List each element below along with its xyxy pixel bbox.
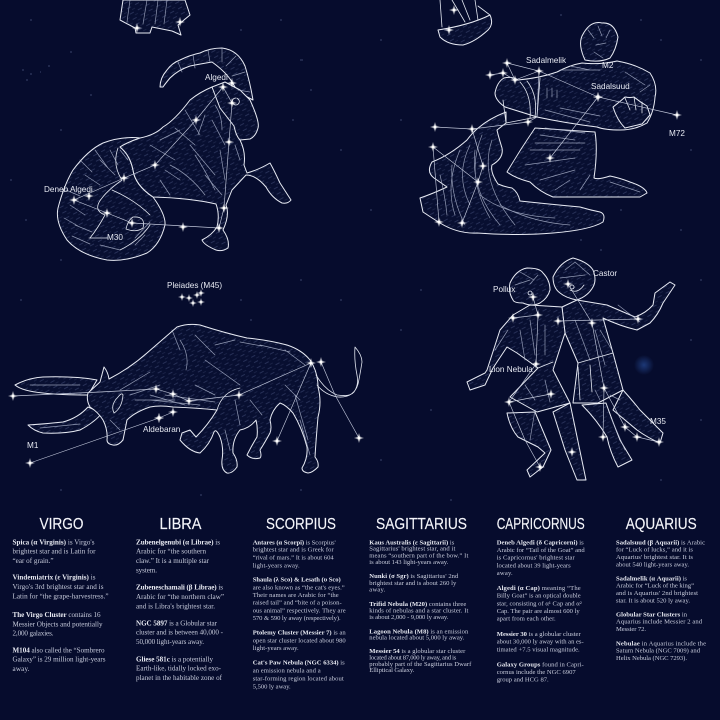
gemini star lines [509, 284, 659, 467]
text: Messier 30: about 30,000 ly away with an es- [497, 639, 584, 646]
text: Sadalmelik: Sadalmelik (α Aquarii) is [616, 575, 687, 582]
text: Nunki: away. [369, 586, 386, 593]
text: Globular Star Clusters: Aquarius include Messier 2 and [616, 619, 703, 626]
text: Shaula and Lesath: raised tail” and “bite of a poison- [253, 600, 342, 607]
text: Kaus Australis: is about 143 light-years away. [369, 559, 449, 566]
text: The Virgo Cluster: Messier Objects and potentially [12, 620, 103, 628]
heading: Scorpius: SCORPIUS [266, 516, 336, 533]
column: Libra [136, 516, 224, 682]
text: Spica [12, 538, 96, 565]
text: Trifid Nebula: Trifid Nebula (M20) contains three [369, 601, 466, 608]
text: Nebulae: Saturn Nebula (NGC 7009) and [616, 648, 701, 655]
label: Algedi: Algedi [205, 73, 228, 82]
text: Galaxy Groups [497, 662, 584, 684]
text: Messier 54: Messier 54 is a globular star cluster [369, 648, 466, 655]
text: Cat's Paw Nebula: an emission nebula and a [253, 668, 321, 675]
text: Trifid Nebula [369, 601, 468, 621]
heading: Aquarius: AQUARIUS [626, 516, 697, 533]
text: Lagoon Nebula: nebula located about 5,000 ly away. [369, 635, 465, 642]
Castor right leg [613, 390, 663, 443]
text: Spica: brightest star and is Latin for [12, 548, 96, 556]
heading: Virgo: VIRGO [40, 516, 84, 533]
text: NGC 5897: NGC 5897 is a Globular star [136, 619, 218, 627]
label: M30: M30 [107, 233, 123, 242]
text: Kaus Australis: Kaus Australis (ε Sagittarii) is [369, 539, 455, 546]
text: Globular Star Clusters: Globular Star Clusters in [616, 611, 688, 618]
constellation: Taurus [8, 281, 364, 473]
text: Globular Star Clusters: Messier 72. [616, 626, 646, 633]
text: Messier 54: located about 87,000 ly away, and is [369, 654, 457, 661]
text: Deneb Algedi: away. [497, 570, 513, 577]
text: Sadalsuud: Aquarius' brightest star. It is [616, 554, 693, 561]
text: Algedi: Cap. The pair are almost 600 ly [497, 608, 580, 615]
text: Sadalmelik: star. It is about 520 ly away. [616, 597, 690, 604]
label: Sadalmelik: Sadalmelik [526, 56, 567, 65]
text: M104: M104 also called the “Sombrero [12, 646, 105, 654]
text: Algedi: Billy Goat” is an optical double [497, 593, 581, 600]
Castor left leg [582, 403, 632, 467]
text: Cat's Paw Nebula: star-forming region located about [253, 675, 344, 682]
text: Antares: light-years away. [253, 562, 300, 569]
text: M104: away. [12, 665, 30, 673]
text: Vindemiatrix: Latin for “the grape-harvestress.” [12, 592, 108, 600]
heading: Libra: LIBRA [160, 516, 202, 533]
text: Sadalsuud [616, 539, 705, 568]
column: Capricornus [497, 516, 585, 684]
text: Zubenelgenubi [136, 538, 220, 575]
twin clothing detail [495, 262, 640, 450]
text: Nebulae: Helix Nebula (NGC 7293). [616, 655, 687, 662]
text: Algedi: Algedi (α Cap) meaning “The [497, 585, 581, 592]
taurus stars [8, 357, 364, 468]
text: Deneb Algedi: Deneb Algedi (δ Capricorni) is [497, 539, 584, 546]
text: The Virgo Cluster [12, 611, 103, 638]
text: Messier 54: probably part of the Sagittarius Dwarf [369, 661, 472, 668]
hand [613, 97, 650, 128]
text: M104: Galaxy” is 29 million light-years [12, 656, 106, 664]
water stream [420, 112, 604, 234]
constellation: Aquarius [420, 23, 685, 234]
ear and body hatching [113, 388, 240, 413]
column: Virgo [12, 516, 108, 673]
text: Trifid Nebula: kinds of nebulas and a star cluster. It [369, 607, 468, 614]
text: Kaus Australis: Sagittarius' brightest star, and it [369, 546, 455, 553]
heading: Capricornus: CAPRICORNUS [497, 516, 585, 533]
text: NGC 5897: cluster and is between 40,000 - [136, 629, 224, 637]
constellation: Gemini [467, 258, 675, 480]
text: Nunki: Nunki (σ Sgr) is Sagittarius' 2nd [369, 573, 459, 580]
text: Algedi: apart from each other. [497, 616, 556, 623]
label: Aldebaran: Aldebaran [143, 425, 181, 434]
label: M1: M1 [27, 441, 39, 450]
text: Shaula and Lesath: 570 & 590 ly away (respectively). [253, 615, 341, 622]
text: Deneb Algedi: Arabic for “Tail of the Goat” and [497, 547, 585, 554]
text: Vindemiatrix: Vindemiatrix (ε Virginis) is [12, 574, 96, 582]
horn ridges and fur [64, 48, 250, 250]
icon: Pleiades star cluster [178, 289, 205, 307]
text: Shaula and Lesath: Their names are Arabic for “the [253, 592, 339, 599]
text: Deneb Algedi [497, 539, 585, 577]
text: Ptolemy Cluster: open star cluster located about 980 [253, 637, 346, 644]
text: Kaus Australis: means “southern part of the bow.” It [369, 552, 468, 559]
text: Cat's Paw Nebula [253, 660, 345, 690]
label: Pleiades (M45): Pleiades (M45) [167, 281, 222, 290]
text: Zubeneschamali: Zubeneschamali (β Librae) is [136, 584, 223, 592]
label: M72: M72 [669, 129, 685, 138]
text: Zubeneschamali: Arabic for “the northern claw” [136, 593, 224, 601]
text: Spica: Spica (α Virginis) is Virgo's [12, 538, 95, 546]
text: Cat's Paw Nebula: 5,500 ly away. [253, 683, 291, 690]
text: Gliese 581c: Gliese 581c is a potentially [136, 655, 213, 663]
text: Sadalsuud: Sadalsuud (β Aquarii) is Arabic [616, 539, 705, 546]
text: Sadalsuud: about 540 light-years away. [616, 561, 689, 568]
capricorn stars [69, 78, 237, 233]
text: Kaus Australis [369, 539, 468, 566]
Pollux head [509, 268, 550, 305]
text: Sadalsuud: for “Luck of lucks,” and it is [616, 547, 693, 554]
label: Sadalsuud: Sadalsuud [591, 82, 630, 91]
label: Pollux: Pollux [493, 285, 515, 294]
gemini stars [504, 279, 664, 472]
text: Shaula and Lesath: Shaula (λ Sco) & Lesath (υ Sco) [253, 577, 341, 584]
text: Globular Star Clusters [616, 611, 703, 633]
text: Messier 30 [497, 631, 584, 653]
text: Nebulae [616, 640, 706, 662]
text: Messier 54: Elliptical Galaxy. [369, 667, 415, 674]
label: M2: M2 [602, 61, 614, 70]
text: Shaula and Lesath [253, 577, 346, 622]
text: Ptolemy Cluster: light-years away. [253, 645, 299, 652]
text: Sadalmelik [616, 575, 698, 604]
text: M104 [12, 646, 106, 673]
text: Shaula and Lesath: ous animal” respectively. They are [253, 607, 346, 614]
text: Gliese 581c: Earth-like, tidally locked exo- [136, 665, 222, 673]
text: Vindemiatrix: Virgo's 3rd brightest star and is [12, 583, 104, 591]
Castor head [553, 258, 595, 300]
column: Scorpius [253, 516, 346, 690]
text: Sadalmelik: and is Aquarius' 2nd brightest [616, 590, 698, 597]
text: Zubenelgenubi: Arabic for “the southern [136, 548, 206, 556]
tail and scale detail [89, 98, 239, 250]
text: NGC 5897 [136, 619, 224, 646]
torso and urn [495, 61, 656, 130]
text: Algedi: star, consisting of α¹ Cap and α² [497, 600, 582, 607]
capricorn head [212, 82, 258, 140]
label: M35: M35 [650, 417, 666, 426]
constellation: Libra scale fragment [438, 0, 492, 45]
text: Ptolemy Cluster: Ptolemy Cluster (Messier 7) is an [253, 630, 346, 637]
text: Galaxy Groups: group and HCG 87. [497, 677, 549, 684]
heading: Sagittarius: SAGITTARIUS [376, 516, 467, 533]
text: Zubenelgenubi: Zubenelgenubi (α Librae) is [136, 538, 220, 546]
Pollux torso and arm [467, 305, 570, 412]
label: Deneb Algedi: Deneb Algedi [44, 185, 93, 194]
aquarius star lines [433, 63, 677, 223]
text: Zubeneschamali: and is Libra's brightest star. [136, 602, 215, 610]
text: Algedi [497, 585, 582, 623]
constellation: Virgo fragment [120, 0, 190, 35]
text: Zubeneschamali [136, 584, 224, 610]
text: Sadalmelik: Arabic for “Luck of the king” [616, 583, 694, 590]
aquarius stars [428, 58, 682, 228]
label: Lion Nebula: Lion Nebula [489, 365, 533, 374]
label: Castor: Castor [593, 269, 617, 278]
capricorn star lines [74, 87, 232, 228]
column: Aquarius [616, 516, 706, 662]
text: Nunki [369, 573, 459, 593]
bull body outline [87, 324, 320, 473]
text: Messier 30: Messier 30 is a globular cluster [497, 631, 581, 638]
text: The Virgo Cluster: The Virgo Cluster contains 16 [12, 611, 101, 619]
text: Zubenelgenubi: system. [136, 567, 157, 575]
bull horns [15, 377, 97, 395]
bull tail [316, 347, 362, 397]
text: Deneb Algedi: is Capricornus' brightest star [497, 555, 575, 562]
text: NGC 5897: 50,000 light-years away. [136, 638, 204, 646]
text: Lagoon Nebula [369, 628, 469, 642]
Pollux legs [507, 403, 586, 480]
text: Messier 54 [369, 648, 472, 674]
text: Zubenelgenubi: claw.” It is a multiple star [136, 557, 210, 565]
text: Trifid Nebula: is about 2,000 - 9,000 ly away. [369, 614, 449, 621]
text: Deneb Algedi: located about 39 light-years [497, 562, 571, 569]
column: Sagittarius [369, 516, 472, 674]
text: Cat's Paw Nebula: Cat's Paw Nebula (NGC 6334) is [253, 660, 345, 667]
text: Antares [253, 539, 336, 569]
capricorn tail spiral [57, 138, 165, 260]
text: Galaxy Groups: cornus include the NGC 6907 [497, 669, 576, 676]
text: Galaxy Groups: Galaxy Groups found in Capri- [497, 662, 584, 669]
text: Antares: Antares (α Scorpi) is Scorpius' [253, 539, 336, 546]
text: Antares: “rival of mars.” It is about 604 [253, 555, 334, 562]
lower body skirt and leg [507, 128, 647, 197]
Castor torso and arm [562, 282, 675, 403]
text: The Virgo Cluster: 2,000 galaxies. [12, 630, 54, 638]
text: Lagoon Nebula: Lagoon Nebula (M8) is an emission [369, 628, 469, 635]
capricorn body [120, 87, 291, 251]
text: Vindemiatrix [12, 574, 108, 600]
head [581, 23, 618, 61]
constellation: Capricornus [44, 48, 291, 260]
text: Spica: “ear of grain.” [12, 557, 54, 565]
text: Ptolemy Cluster [253, 630, 346, 652]
text: Messier 30: timated +7.5 visual magnitude. [497, 646, 580, 653]
taurus star lines [13, 362, 359, 463]
text: Nebulae: Nebulae in Aquarius include the [616, 640, 706, 647]
text: Gliese 581c: planet in the habitable zone of [136, 674, 223, 682]
text: Gliese 581c [136, 655, 223, 682]
text: Nunki: brightest star and is about 260 ly [369, 580, 457, 587]
capricorn horn [160, 48, 253, 100]
text: Shaula and Lesath: are also known as “the cat's eyes.” [253, 584, 345, 591]
text: Antares: brightest star and is Greek for [253, 547, 334, 554]
